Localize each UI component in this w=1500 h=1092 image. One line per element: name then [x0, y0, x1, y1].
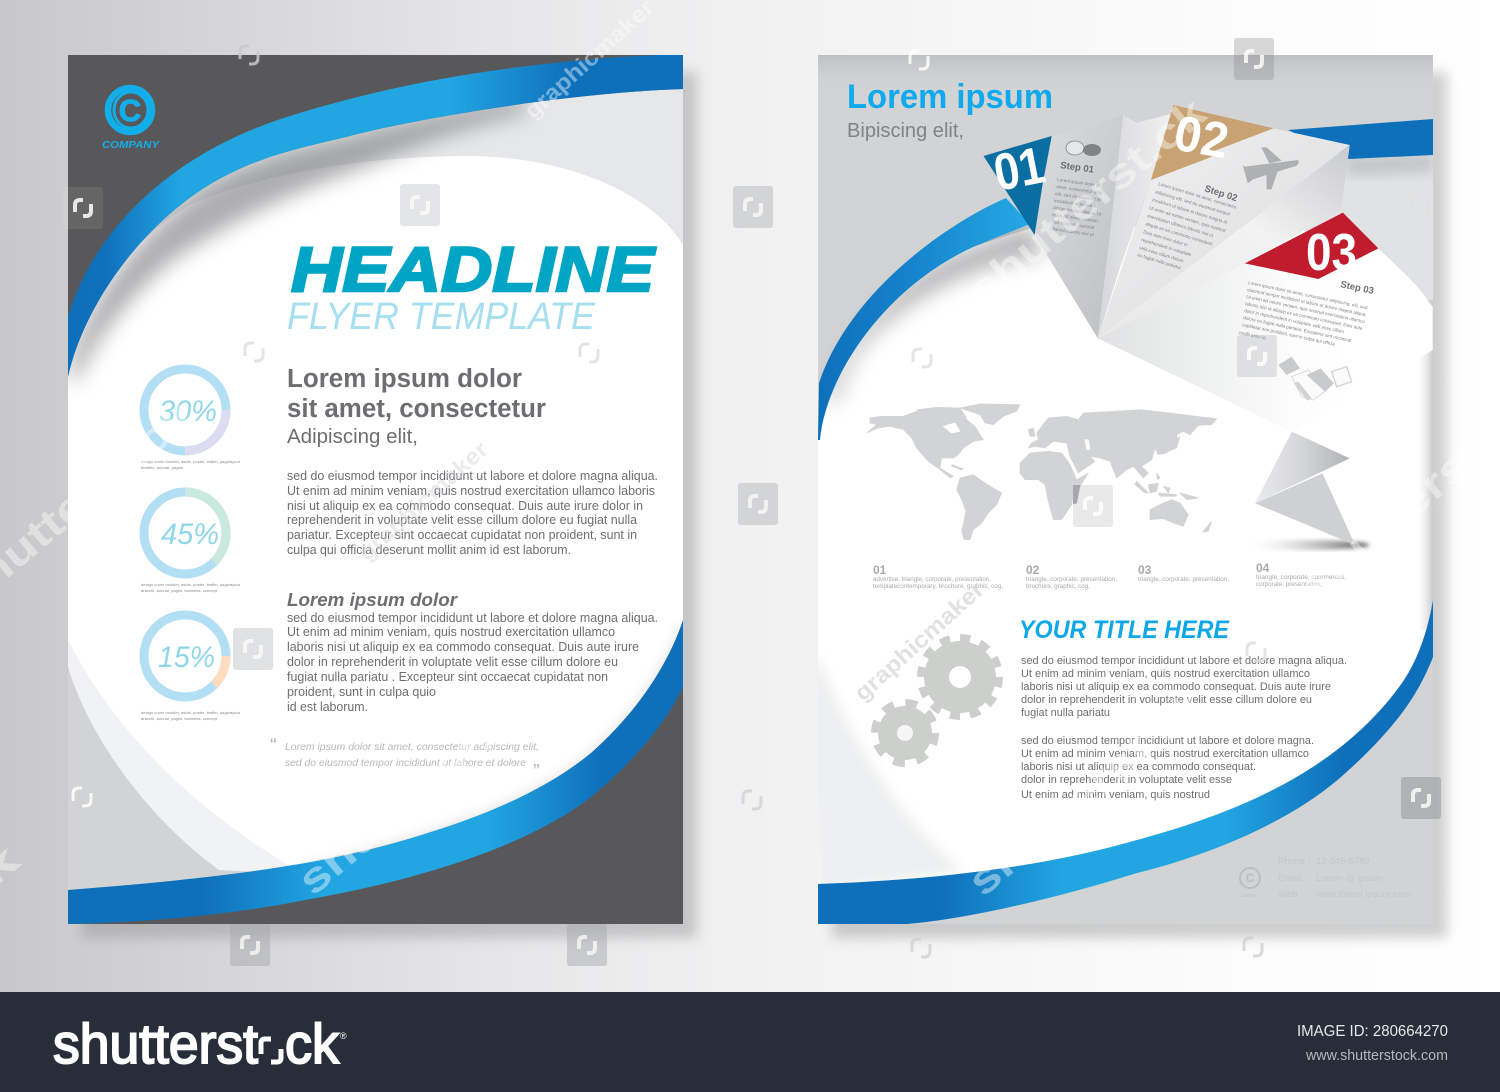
map legend: advertise, triangle, corporate, presentation,	[873, 577, 991, 583]
watermark: square bracket icons	[63, 38, 1441, 966]
watermark: graphicmaker diagonals	[353, 0, 989, 706]
panel: left flyer page	[68, 54, 697, 938]
step 01 text: ullamco laboris nisi ut	[1050, 226, 1095, 237]
contact block	[1238, 856, 1411, 900]
icon: speech bubbles	[1066, 141, 1101, 156]
footer logo: ®	[340, 1031, 347, 1041]
step 02 text: eu fugiat nulla pariatur.	[1137, 252, 1183, 271]
heading: lorem ipsum: Lorem ipsum	[847, 78, 1053, 116]
right body text two: Ut enim ad minim veniam, quis nostrud	[1021, 789, 1210, 801]
icon: airplane	[1243, 147, 1299, 189]
step 03 text: laboris nisi ut aliquip ex ea commodo consequat. Duis aute	[1245, 301, 1363, 331]
step 01 text: Step 01	[1060, 160, 1095, 176]
chart: 45% donut	[141, 492, 241, 593]
footer image id: IMAGE ID: 280664270	[1297, 1023, 1448, 1040]
contact block: C	[1246, 871, 1255, 885]
contact block: 12-345-6789	[1316, 856, 1370, 867]
step 02 text: exercitation ullamco laboris nisi ut	[1147, 213, 1215, 238]
step 01 text: elit, sed do eiusmod te	[1055, 191, 1102, 202]
chart: 45% donut: design cover booklet, aside, poster, leaflet, pagelayout	[141, 582, 241, 587]
subheading: bipiscing elit: Bipiscing elit,	[847, 120, 964, 142]
step 02 text: incididunt ut labore et dolore magna al	[1152, 197, 1228, 225]
chart: 15% donut: artwork, annual, pages, business, concept	[141, 716, 218, 721]
watermark: shutterstock diagonals: shutterst.ck	[1291, 383, 1500, 609]
tag number 02: 02	[1170, 105, 1233, 169]
map legend: 02	[1026, 563, 1040, 577]
contact block: www.lorem ipsum.com	[1315, 889, 1411, 900]
step 03 text	[1239, 279, 1375, 347]
tag number 03: 03	[1306, 224, 1357, 282]
contact block: Email :	[1278, 873, 1307, 884]
body text one: Ut enim ad minim veniam, quis nostrud exercitation ullamco laboris	[287, 484, 655, 498]
map legend: 04	[1256, 561, 1270, 575]
pull quote: ”	[533, 761, 540, 783]
contact block: COMPANY	[1238, 893, 1258, 898]
chart: 30% donut: design cover booklet, aside, poster, leaflet, pagelayout	[141, 459, 241, 464]
pull quote: “	[270, 735, 277, 757]
step 02 text: Step 02	[1203, 183, 1239, 204]
right body text one: fugiat nulla pariatu	[1021, 707, 1110, 719]
body text two: laboris nisi ut aliquip ex ea commodo consequat. Duis aute irure	[287, 640, 639, 654]
watermark: graphicmaker diagonals: graphicmaker	[353, 436, 493, 566]
icon: company logo: C	[119, 93, 141, 128]
watermark: shutterstock diagonals: shutterst.ck	[289, 678, 545, 904]
bottom blue ribbon	[818, 600, 1433, 925]
step 03 text: Ut enim ad minim veniam, quis nostrud exercitation ullamco	[1246, 294, 1366, 324]
icon: gears	[875, 638, 999, 763]
step 02 text: Duis aute irure dolor in	[1143, 229, 1189, 248]
right body text two: dolor in reprehenderit in voluptate velit esse	[1021, 774, 1232, 786]
tag number 01: 01	[989, 136, 1049, 203]
heading: lorem ipsum: sit amet, consectetur	[287, 395, 546, 423]
step 02 text: adipiscing elit, sed do eiusmod tempor	[1155, 189, 1231, 217]
step 03 text: mollit anim id	[1239, 330, 1266, 341]
map legend: 01	[873, 563, 887, 577]
step 02 text: aliquip ex ea commodo consequat.	[1145, 221, 1214, 247]
right body text one: sed do eiusmod tempor incididunt ut labore et dolore magna aliqua.	[1021, 655, 1347, 667]
pull quote: sed do eiusmod tempor incididunt ut labore et dolore	[285, 757, 526, 769]
map legend: 03	[1138, 563, 1152, 577]
paper plane infographic	[984, 105, 1433, 550]
icon: company logo	[102, 88, 160, 151]
plane tail	[1239, 432, 1369, 550]
step 03 text: cupidatat non proident, sunt in culpa qui officia	[1242, 322, 1336, 347]
chart: 45% donut: artwork, annual, pages, business, concept	[141, 588, 218, 593]
right body text one	[1021, 655, 1347, 719]
body text one: culpa qui officia deserunt mollit anim id est laborum.	[287, 543, 571, 557]
right body text one: Ut enim ad minim veniam, quis nostrud exercitation ullamco	[1021, 668, 1310, 680]
step 01 text: amet, consectetur adip	[1056, 184, 1103, 196]
step 03 text: dolore eu fugiat nulla pariatur. Excepteur sint occaecat	[1243, 315, 1353, 343]
heading: lorem ipsum: Lorem ipsum dolor	[287, 365, 522, 393]
heading: lorem ipsum	[287, 365, 546, 448]
body text one: reprehenderit in voluptate velit esse cillum dolore eu fugiat nulla	[287, 513, 637, 527]
footer logo: shutterst	[53, 1012, 258, 1075]
map legend: templatecontemporary, brochure, graphic, cog,	[873, 584, 1003, 590]
right body text two	[1021, 735, 1314, 801]
map legend: triangle, corporate, presentation,	[1138, 577, 1229, 583]
chart: 30% donut: 30%	[159, 395, 217, 428]
contact block: Phone :	[1278, 856, 1311, 867]
step 03 text: Lorem ipsum dolor sit amet, consectetur adipiscing, elit, sed	[1248, 280, 1368, 310]
footer url: www.shutterstock.com	[1305, 1047, 1448, 1064]
chart: 30% donut: leaflets, annual, pages	[141, 465, 183, 470]
pull quote	[270, 735, 540, 783]
body text two: fugiat nulla pariatu . Excepteur sint occaecat cupidatat non	[287, 670, 608, 684]
title: your title here: YOUR TITLE HERE	[1019, 616, 1230, 644]
step 01 text: dolore magna aliqua. Ut	[1053, 205, 1103, 217]
heading: lorem ipsum: Adipiscing elit,	[287, 426, 418, 448]
blue ribbon: right strip	[1288, 119, 1433, 159]
map legend	[873, 561, 1346, 590]
body text one: pariatur. Excepteur sint occaecat cupidatat non proident, sunt in	[287, 528, 637, 542]
step 02 text	[1137, 181, 1239, 271]
right body text one: laboris nisi ut aliquip ex ea commodo consequat. Duis aute irure	[1021, 681, 1331, 693]
body text two: Ut enim ad minim veniam, quis nostrud exercitation ullamco	[287, 625, 615, 639]
step 01 text	[1050, 160, 1103, 237]
panel: right flyer page	[800, 55, 1447, 938]
right body text two: Ut enim ad minim veniam, quis nostrud exercitation ullamco	[1021, 748, 1309, 760]
body text two: proident, sunt in culpa quio	[287, 685, 436, 699]
chart: 15% donut: design cover booklet, aside, poster, leaflet, pagelayout	[141, 710, 241, 715]
map legend: triangle, corporate, presentation,	[1026, 577, 1117, 583]
step 01 text: enim ad minim veniam,	[1052, 212, 1099, 224]
step 03 text: dolor in reprehenderit in voluptate velit esse cillum	[1244, 308, 1345, 334]
chart: 15% donut: 15%	[158, 641, 215, 674]
subheadline: FLYER TEMPLATE	[287, 296, 596, 338]
bottom blue ribbon	[68, 620, 683, 924]
footer logo: ck	[285, 1012, 340, 1075]
watermark: shutterstock diagonals	[0, 88, 1500, 905]
body text two: id est laborum.	[287, 700, 368, 714]
icon: handshake	[1278, 357, 1352, 401]
contact block: Web :	[1278, 889, 1303, 900]
step 03 text: eiusmod tempor incididunt ut labore et dolore magna aliqua.	[1247, 287, 1367, 317]
step 01 text: quis nostrud exercitat	[1051, 219, 1096, 230]
contact block: Lorem @ ipsum	[1316, 873, 1383, 884]
blue ribbon: left curve	[818, 198, 1030, 440]
body text one: sed do eiusmod tempor incididunt ut labore et dolore magna aliqua.	[287, 469, 658, 483]
body text one	[287, 469, 658, 557]
body text two: sed do eiusmod tempor incididunt ut labore et dolore magna aliqua.	[287, 611, 658, 625]
right body text one: dolor in reprehenderit in voluptate velit esse cillum dolore eu	[1021, 694, 1312, 706]
step 01 text: incididunt ut labore et	[1054, 198, 1099, 209]
step 02 text: reprehenderit in voluptate	[1141, 237, 1192, 257]
body text two: dolor in reprehenderit in voluptate velit esse cillum dolore eu	[287, 655, 618, 669]
subheading italic: Lorem ipsum dolor	[287, 590, 458, 610]
footer bar	[0, 992, 1500, 1092]
right body text two: sed do eiusmod tempor incididunt ut labore et dolore magna.	[1021, 735, 1314, 747]
watermark: shutterstock diagonals: shutterst.ck	[959, 88, 1215, 314]
map legend: triangle, corporate, commercial,	[1256, 575, 1346, 581]
step 03 text: Step 03	[1339, 279, 1375, 297]
world map	[867, 404, 1217, 540]
top blue ribbon	[68, 54, 683, 377]
body text one: nisi ut aliquip ex ea commodo consequat. Duis aute irure dolor in	[287, 499, 643, 513]
map legend: corporate, presentation,	[1256, 582, 1322, 588]
body text two	[287, 611, 658, 714]
chart: 45% donut: 45%	[161, 518, 219, 551]
right body text two: laboris nisi ut aliquip ex ea commodo consequat.	[1021, 761, 1256, 773]
icon: company logo: COMPANY	[102, 139, 160, 151]
pull quote: Lorem ipsum dolor sit amet, consectetur adipiscing elit,	[285, 741, 539, 753]
chart: 15% donut	[141, 615, 241, 721]
map legend: brochure, graphic, cog,	[1026, 584, 1090, 590]
chart: 30% donut	[141, 369, 241, 470]
step 02 text: velit esse cillum dolore	[1139, 245, 1185, 264]
step 01 text: Lorem ipsum dolor sit	[1057, 177, 1102, 188]
step 02 text: Lorem ipsum dolor sit amet, consectetur	[1158, 181, 1238, 210]
watermark: graphicmaker diagonals: graphicmaker	[519, 0, 659, 124]
step 02 text: Ut enim ad minim veniam, quis nostrud	[1149, 205, 1227, 233]
watermark: shutterstock diagonals: shutterst.ck	[959, 679, 1215, 905]
headline: HEADLINE	[291, 235, 656, 305]
watermark: graphicmaker diagonals: graphicmaker	[849, 576, 989, 706]
